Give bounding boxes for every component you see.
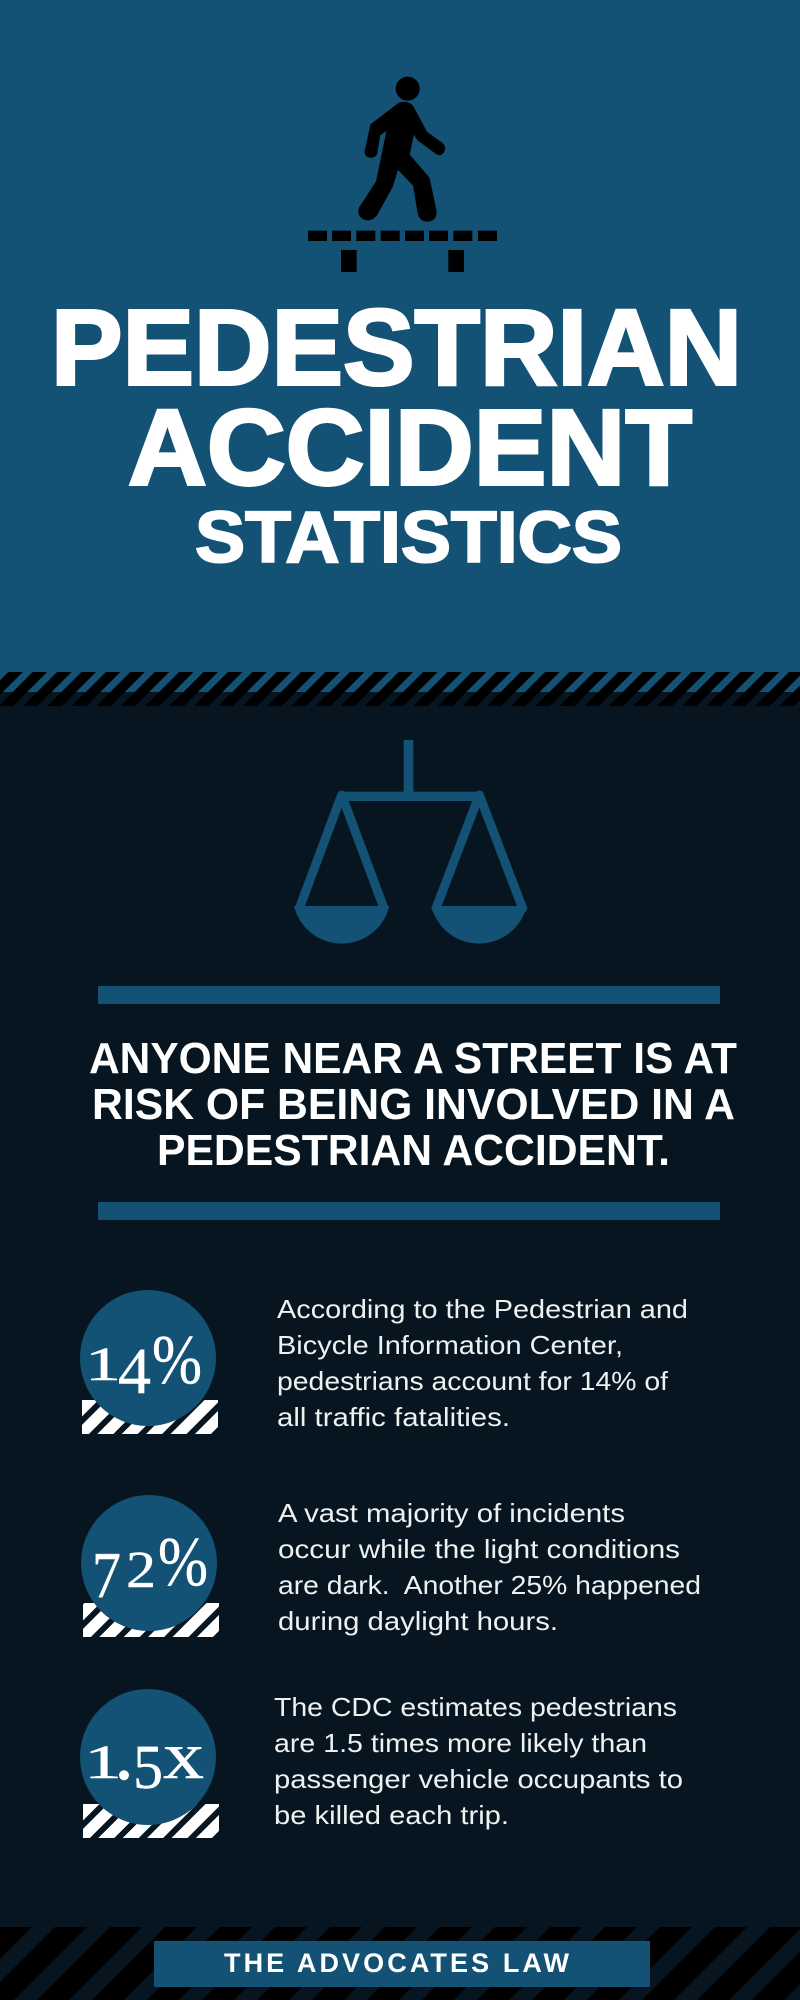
icon: scales of justice <box>294 740 527 944</box>
stat text: 1.5x: be killed each trip. <box>274 1800 509 1830</box>
stat text: 72%: A vast majority of incidents <box>278 1498 625 1528</box>
stat badge: 72% <box>81 1495 219 1637</box>
heading: risk statement: RISK OF BEING INVOLVED IN A <box>92 1080 735 1129</box>
stat badge: 72%: 7 <box>92 1539 121 1612</box>
stat text: 72%: during daylight hours. <box>278 1606 558 1636</box>
top rule <box>98 986 720 1004</box>
stat text: 72%: occur while the light conditions <box>278 1534 680 1564</box>
title: STATISTICS <box>195 498 622 578</box>
stat badge: 1.5x: . <box>114 1709 134 1797</box>
stat badge: 1.5x: x <box>163 1719 204 1793</box>
stat text: 1.5x: passenger vehicle occupants to <box>274 1764 683 1794</box>
icon: pedestrian walking on platform <box>308 77 497 272</box>
stat text: 14%: pedestrians account for 14% of <box>277 1366 669 1396</box>
footer stripes <box>0 1927 800 2000</box>
stat badge: 72%: 2 <box>126 1542 156 1599</box>
stat text: 1.5x <box>274 1692 683 1830</box>
stat text: 14%: According to the Pedestrian and <box>277 1294 688 1324</box>
stat text: 14%: all traffic fatalities. <box>277 1402 510 1432</box>
stat badge: 1.5x: 5 <box>133 1734 163 1802</box>
stat text: 72% <box>278 1498 701 1636</box>
stat badge: 14%: % <box>152 1322 202 1399</box>
heading: risk statement: PEDESTRIAN ACCIDENT. <box>157 1126 670 1175</box>
stat badge: 1.5x <box>80 1689 219 1838</box>
hazard stripe divider <box>0 672 800 706</box>
stat text: 72%: are dark. Another 25% happened <box>278 1570 701 1600</box>
footer banner: THE ADVOCATES LAW <box>224 1948 570 1978</box>
bottom rule <box>98 1202 720 1220</box>
heading: risk statement <box>89 1034 737 1175</box>
title: PEDESTRIAN <box>51 286 742 408</box>
stat badge: 1.5x: 1 <box>84 1736 122 1789</box>
stat badge: 72%: % <box>158 1524 208 1601</box>
footer banner <box>154 1941 650 1987</box>
title <box>51 286 742 578</box>
title: ACCIDENT <box>128 386 692 508</box>
stat text: 14% <box>277 1294 688 1432</box>
stat badge: 14% <box>80 1290 218 1434</box>
stat text: 1.5x: The CDC estimates pedestrians <box>274 1692 677 1722</box>
panel: blue header <box>0 0 800 692</box>
stat text: 14%: Bicycle Information Center, <box>277 1330 623 1360</box>
stat badge: 14%: 4 <box>118 1335 151 1408</box>
stat badge: 14%: 1 <box>85 1338 121 1391</box>
stat text: 1.5x: are 1.5 times more likely than <box>274 1728 647 1758</box>
heading: risk statement: ANYONE NEAR A STREET IS AT <box>89 1034 737 1083</box>
